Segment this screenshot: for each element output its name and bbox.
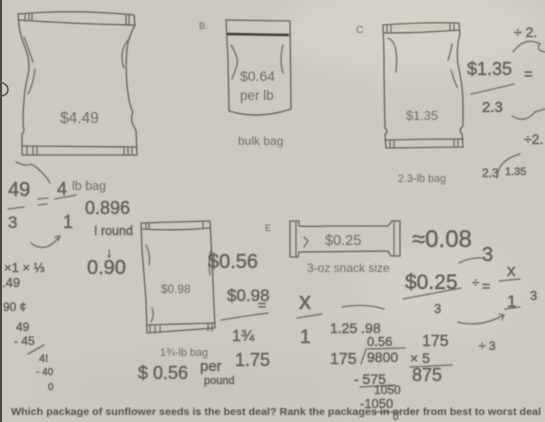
handwritten work: package E: 3: [434, 301, 441, 316]
handwritten work: package D: per: [200, 358, 222, 375]
handwritten work: package D: 1.25 .98: [330, 320, 381, 336]
handwritten work: long division: 875: [412, 365, 442, 385]
package A: size label: lb bag: [72, 179, 106, 193]
handwritten work: package E: [403, 226, 537, 353]
handwritten work: package A: 49: [8, 179, 30, 201]
handwritten work: package D: x: [299, 288, 311, 315]
handwritten work: package E: x: [507, 261, 516, 280]
handwritten work: package A: 4!: [39, 353, 48, 365]
handwritten work: package E: $0.25: [405, 271, 458, 294]
handwritten work: long division: 175: [330, 351, 357, 368]
package C: price: $1.35: [406, 108, 438, 123]
handwritten work: package C: ÷2.: [524, 131, 543, 147]
handwritten work: long division: × 5: [410, 350, 430, 366]
handwritten work: long division: [330, 333, 452, 422]
handwritten work: long division: 9800: [367, 349, 398, 365]
handwritten work: package C: $1.35: [467, 59, 512, 79]
handwritten work: package C: ÷ 2.: [514, 24, 537, 40]
handwritten work: package E: ÷ 3: [479, 339, 496, 353]
handwritten work: package C: [467, 24, 545, 180]
handwritten work: package D: pound: [204, 375, 235, 387]
handwritten work: package E: 3: [482, 244, 493, 266]
handwritten work: package E: =: [482, 278, 490, 294]
handwritten work: package A: .49: [2, 275, 20, 290]
question text: Which package of sunflower seeds is the best deal? Rank the packages in order from best to worst deal: [11, 407, 541, 418]
handwritten work: package A: 0.896: [85, 198, 130, 218]
handwritten work: package A: I round: [94, 224, 133, 238]
handwritten work: package A: 3: [8, 213, 17, 232]
handwritten work: package A: - 45: [14, 334, 35, 348]
handwritten work: long division: - 575: [354, 371, 386, 387]
left edge shadow: [0, 0, 2, 422]
handwritten work: package D: 1: [300, 327, 311, 348]
handwritten work: package A: 4: [57, 179, 67, 199]
handwritten work: package A: 90 ¢: [3, 300, 26, 314]
handwritten work: package D: $ 0.56: [138, 363, 188, 383]
package D: bag: [141, 221, 215, 333]
handwritten work: package D: [138, 251, 384, 387]
handwritten work: package A: 0: [48, 382, 54, 393]
handwritten work: package A: 49: [16, 320, 30, 334]
package D: price: $0.98: [161, 282, 191, 296]
package label: E: E: [265, 223, 271, 233]
package A: bag: [18, 12, 137, 155]
package label: C: C: [356, 24, 364, 36]
handwritten work: package C: 1.35: [505, 166, 526, 178]
handwritten work: package D: $0.98: [227, 286, 270, 305]
handwritten work: long division: 175: [422, 333, 449, 350]
package B: price: $0.64: [240, 68, 275, 84]
handwritten work: package D: =: [258, 297, 266, 313]
handwritten work: long division: -1050: [360, 396, 393, 411]
package label: B: B.: [199, 21, 208, 32]
handwritten work: package A: 0.90: [87, 257, 126, 279]
handwritten work: package D: $0.56: [208, 251, 258, 273]
handwritten work: long division: 1050: [374, 383, 401, 397]
package A: price: $4.49: [60, 110, 99, 127]
handwritten work: package E: ÷: [472, 275, 479, 290]
package B: bag: [226, 20, 291, 115]
handwritten work: package D: 1¾: [232, 328, 255, 345]
package E: size label: 3-oz snack size: [307, 261, 390, 275]
handwritten work: package A: [2, 162, 133, 393]
handwritten work: long division: 0.56: [367, 334, 392, 349]
package B: bulk bag label: bulk bag: [238, 134, 283, 148]
package C: size label: 2.3-lb bag: [398, 173, 446, 185]
package D: size label: 1¾-lb bag: [160, 347, 208, 359]
package E: snack bar: [290, 221, 400, 257]
handwritten work: package E: 1: [507, 292, 516, 311]
handwritten work: package E: ≈0.08: [412, 226, 472, 253]
handwritten work: package C: 2.3: [482, 166, 499, 180]
handwritten work: package A: 1: [63, 212, 73, 232]
package C: bag: [383, 23, 463, 148]
handwritten work: package C: 2.3: [482, 99, 503, 116]
handwritten work: package A: ×1 × ⅓: [4, 260, 45, 275]
package E: price: $0.25: [325, 233, 361, 249]
handwritten work: package A: - 40: [36, 367, 54, 378]
handwritten work: package D: 1.75: [235, 350, 270, 370]
handwritten work: package A: ↓: [106, 245, 112, 260]
handwritten work: package E: 3: [530, 288, 537, 303]
margin hole mark: [0, 82, 8, 96]
handwritten work: package C: =: [524, 66, 533, 83]
package B: per lb: per lb: [240, 88, 274, 103]
